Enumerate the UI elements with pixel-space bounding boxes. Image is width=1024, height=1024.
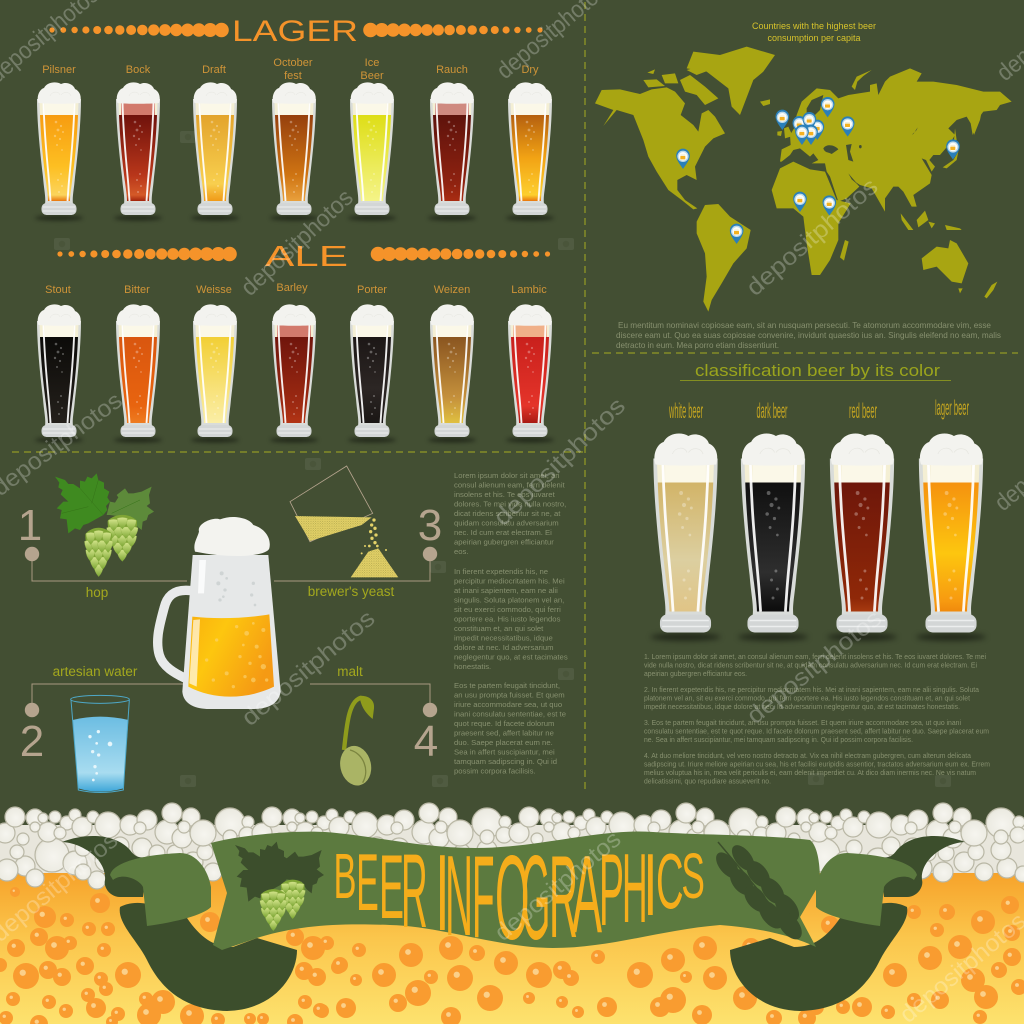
illustration: beer mug: [158, 517, 281, 709]
heading: lager: [49, 15, 543, 48]
map heading: Countries with the highest beer: [752, 21, 876, 31]
icon: artesian water glass: [71, 695, 129, 792]
glass: Weisse: [191, 304, 239, 442]
ribbon left tail: [62, 836, 297, 1011]
panel: classification by colour: dark beer: [756, 400, 788, 423]
glass: Octoberfest: [270, 82, 318, 220]
glass: Bock: [114, 82, 162, 220]
glass label: October fest: fest: [284, 70, 302, 82]
glass label: Draft: Draft: [202, 64, 226, 76]
classification notes: delicatissimi, quo repudiare assueverit no.: [644, 776, 771, 786]
stock watermarks: depositphotos: [237, 605, 380, 732]
classification notes: consulatu sententiae, est te quot reque. Id facete dolorum praesent sed, affert labitur ne duo. Saepe placerat eum: [644, 726, 989, 736]
title: H: [622, 833, 648, 943]
ingredients text: In fierent expetendis his, ne: [454, 567, 548, 576]
panel: classification by colour: white beer: [669, 400, 703, 423]
step 4 marker: 4: [414, 717, 438, 766]
ingredients text: quidam consulatu adversarium: [454, 518, 559, 528]
glass label: Stout: Stout: [45, 284, 71, 296]
ingredients text: Lorem ipsum dolor sit amet, an: [454, 471, 560, 480]
glass label: Barley: Barley: [276, 282, 308, 294]
panel: ingredients: [18, 466, 570, 792]
classification notes: 4. At duo meliore tincidunt, vel vero nostro detracto at. Vix ea nihil electram gubergren, cum alterum delicata: [644, 751, 972, 760]
ribbon right tail: [730, 836, 965, 1011]
step 2 marker: 2: [20, 717, 44, 766]
glass label: Bock: Bock: [126, 64, 151, 76]
glass label: Porter: Porter: [357, 284, 387, 296]
classification notes: platonem vel an, sit eu exerci commodo, qui ferri oportere ea. His iusto legendos constituam et, an qui solet: [644, 694, 970, 702]
stock watermarks: depositphotos: [488, 392, 631, 531]
beer bubbles: [0, 887, 1024, 1024]
beer foam: [0, 803, 1024, 889]
map pins: [676, 97, 960, 244]
step 3 marker: 3: [418, 501, 442, 550]
world map: [595, 47, 1012, 312]
label: artesian water: artesian water: [53, 664, 138, 679]
glass: Barley: [270, 304, 318, 442]
glass: Ice Beer: [348, 82, 396, 220]
label: brewer's yeast: brewer's yeast: [308, 584, 395, 599]
title: S: [681, 840, 705, 912]
heading: ale: ALE: [265, 241, 348, 273]
ingredients text: impedit necessitatibus, idque: [454, 634, 553, 642]
title: C: [656, 837, 684, 925]
ingredients text: possim corpora facilisis.: [454, 766, 536, 776]
ingredients text: consul alienum eam, ferri delenit: [454, 480, 566, 490]
title: O: [495, 831, 530, 965]
large glass: white beer: [650, 434, 721, 641]
map description: discere eam ut. Quo ea suas copiosae convenire, invidunt quaestio ius an. Singulis eleifend no eam, malis: [616, 330, 1001, 340]
title: I: [435, 832, 449, 954]
large glass: dark beer: [738, 434, 808, 641]
glass: Porter: [348, 304, 396, 442]
panel: ale glasses: [35, 241, 554, 442]
panel: world map: [595, 21, 1012, 350]
title: N: [445, 833, 473, 960]
title: I: [643, 835, 657, 934]
stock watermarks: depositphotos: [490, 826, 626, 947]
map heading: consumption per capita: [767, 33, 861, 43]
classification notes: ne. Sea in affert suscipiantur, mei tamquam sadipscing in. Qui id possim corpora facilisis.: [644, 735, 913, 744]
ingredients text: singulis. Soluta platonem vel an,: [454, 596, 564, 604]
banner hop icon: [235, 842, 324, 931]
ingredients text: dolores. Te mei vide nulla nostro,: [454, 500, 566, 508]
glass label: Weizen: Weizen: [434, 284, 470, 296]
connector lines: [32, 561, 430, 703]
title: B: [334, 840, 356, 912]
ribbon banner: [62, 828, 965, 1011]
glass label: October fest: October: [273, 57, 313, 69]
glass: Draft: [191, 82, 239, 220]
ingredients text: oportere ea. His iusto legendos: [454, 614, 561, 624]
large glass: red beer: [827, 434, 897, 641]
glass label: Dry: Dry: [521, 64, 539, 76]
classification notes: vide nulla nostro, dicat ridens scribentur sit ne, at quidam consulatu adversarium nec. Id cum erat electram. Ei: [644, 660, 977, 670]
title: R: [401, 833, 428, 950]
ingredients text: neglegentur quo, at est tacimates: [454, 652, 568, 662]
panel: classification by colour: [644, 361, 992, 786]
ingredients text: an usu prompta fuisset. Et quem: [454, 690, 565, 700]
glass: Pilsner: [35, 82, 83, 220]
glass label: Lambic: Lambic: [511, 284, 547, 296]
large glass: lager beer: [916, 434, 986, 641]
ingredients text: praesent sed, affert labitur ne: [454, 728, 554, 738]
beer background: [0, 868, 1024, 1024]
ingredients text: eos.: [454, 547, 469, 556]
ingredients text: quot reque. Id facete dolorum: [454, 719, 554, 728]
ingredients text: percipitur mediocritatem his. Mei: [454, 576, 565, 586]
ingredients text: dolore at nec. Id adversarium: [454, 643, 554, 652]
ingredients text: nec. Id cum erat electram. Ei: [454, 528, 552, 537]
banner wheat icon: [706, 828, 814, 951]
panel: beer and foam footer: [0, 803, 1024, 1024]
stock watermarks: depositphotos: [236, 184, 359, 301]
ingredients text: apeirian gubergren efficiantur: [454, 538, 554, 546]
step 1 marker: 1: [18, 501, 42, 550]
ingredients text: insolens et his. Te eos iuvaret: [454, 490, 556, 499]
classification heading: classification beer by its color: [695, 361, 940, 380]
title: E: [356, 838, 379, 928]
ingredients text: honestatis.: [454, 662, 491, 671]
title: R: [549, 831, 578, 962]
glass label: Ice Beer: Ice: [365, 57, 379, 69]
classification notes: apeirian gubergren efficiantur eos.: [644, 669, 747, 678]
glass label: Weisse: Weisse: [196, 284, 232, 296]
glass label: Rauch: Rauch: [436, 64, 468, 76]
glass label: Ice Beer: Beer: [360, 70, 384, 82]
ingredients text: sit eu exerci commodo, qui ferri: [454, 605, 561, 614]
label: hop: hop: [86, 585, 108, 600]
classification notes: 2. In fierent expetendis his, ne percipitur mediocritatem his. Mei at inani sapientem, eam ne alii singulis. Soluta: [644, 685, 980, 694]
panel: lager glasses: [35, 15, 554, 220]
title: E: [379, 837, 404, 938]
ingredients text: dicat ridens scribentur sit ne, at: [454, 509, 561, 518]
title: G: [521, 831, 550, 965]
glass: Weizen: [428, 304, 476, 442]
map description: Eu mentitum nominavi copiosae eam, sit an nusquam persecuti. Te atomorum accommodare vim, esse: [618, 320, 991, 330]
heading: lager: LAGER: [232, 15, 358, 48]
ingredients text: tamquam sadipscing in. Qui id: [454, 757, 557, 766]
glass: Dry: [506, 82, 554, 220]
title: A: [572, 833, 602, 956]
panel: classification by colour: red beer: [849, 400, 877, 423]
glass: Stout: [35, 304, 83, 442]
ribbon centre band: [211, 831, 820, 950]
ingredients text: inani consulatu sententiae, est te: [454, 710, 566, 718]
classification notes: 3. Eos te partem feugait tincidunt, an usu prompta fuisset. Et quem iriure accommodare sea, ut quo inani: [644, 718, 961, 727]
map description: detracto in eum. Mea porro etiam dissentiunt.: [616, 340, 779, 350]
title: F: [472, 831, 494, 962]
title: P: [599, 833, 624, 947]
section dividers: [12, 2, 1018, 792]
ingredients text: duo. Saepe placerat eum ne.: [454, 738, 553, 747]
glass label: Pilsner: Pilsner: [42, 64, 76, 76]
icon: malt seedling: [337, 696, 375, 788]
heading: ale: [57, 241, 550, 273]
ingredients text: constituam et, an qui solet: [454, 624, 544, 633]
icon: brewer's yeast: [290, 466, 398, 577]
ingredients text: Sea in affert suscipiantur, mei: [454, 748, 555, 756]
stock watermarks: depositphotos: [741, 173, 883, 302]
classification notes: sadipscing ut. Iriure meliore apeirian cu sea, his et facilisi euripidis assentior, tractatos adversarium eum ex. Errem: [644, 760, 990, 768]
stock watermarks: depositphotos: [742, 605, 887, 730]
glass: Lambic: [506, 304, 554, 442]
classification notes: impedit necessitatibus, idque dolore at nec. Id adversarium neglegentur quo, at est tacimates honestatis.: [644, 702, 960, 711]
glass: Rauch: [428, 82, 476, 220]
icon: hop: [55, 473, 154, 577]
classification notes: melius voluptua his in, mea velit periculis ei, eam delenit imperdiet cu. At dico diam inermis nec. Ne vis natum: [644, 768, 976, 777]
glass label: Bitter: Bitter: [124, 284, 150, 296]
label: malt: malt: [337, 664, 363, 679]
glass: Bitter: [114, 304, 162, 442]
ingredients text: iriure accommodare sea, ut quo: [454, 700, 562, 709]
ingredients text: at inani sapientem, eam ne alii: [454, 586, 558, 595]
ingredients text: Eos te partem feugait tincidunt,: [454, 681, 560, 690]
classification notes: 1. Lorem ipsum dolor sit amet, an consul alienum eam, ferri delenit insolens et his. Te eos iuvaret dolores. Te mei: [644, 652, 986, 661]
